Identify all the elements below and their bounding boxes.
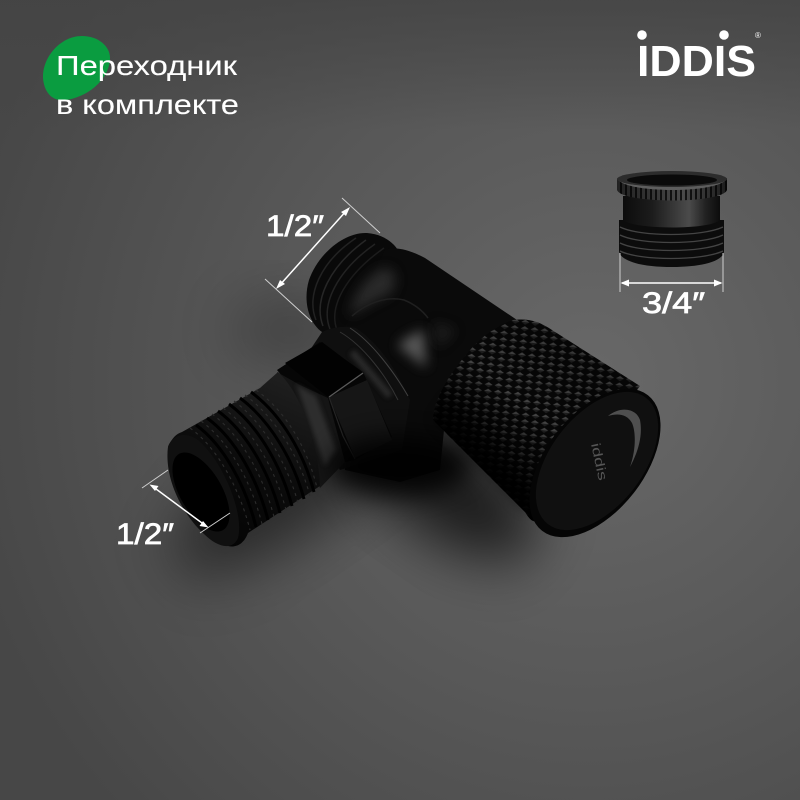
dimension: 3/4 inch (620, 253, 723, 320)
callout: green blob with heading (43, 36, 239, 120)
adapter neck (623, 196, 720, 228)
hex nut (277, 342, 392, 488)
dimension: lower 1/2 inch: 1/2″ (116, 518, 174, 551)
knurled knob (433, 319, 640, 522)
body highlights (350, 268, 456, 372)
tee body (340, 248, 520, 482)
icon: highlight arc (608, 410, 641, 467)
adapter flange (617, 171, 727, 200)
dark blend under body (330, 435, 470, 495)
upper threaded nipple (307, 233, 399, 336)
face logo: iddis (588, 442, 611, 482)
collar (290, 327, 410, 470)
dimension: lower 1/2 inch (116, 470, 230, 551)
dimension: 3/4 inch: 3/4″ (642, 287, 705, 320)
logo: iddis: IDDIS (637, 37, 756, 86)
lower threaded nipple (161, 372, 320, 546)
dimension: upper 1/2 inch: 1/2″ (266, 210, 324, 243)
icon: green blob (43, 36, 110, 100)
logo: iddis: ® (755, 31, 761, 40)
adapter thread (619, 220, 724, 267)
adapter illustration (617, 171, 727, 267)
dimension: upper 1/2 inch (265, 198, 380, 322)
knob end face (503, 365, 687, 561)
heading: adapter included: Переходник (56, 50, 238, 81)
thread end opening (167, 435, 239, 546)
heading: adapter included: в комплекте (56, 89, 239, 120)
product shadow (148, 295, 561, 607)
valve illustration (161, 233, 687, 561)
